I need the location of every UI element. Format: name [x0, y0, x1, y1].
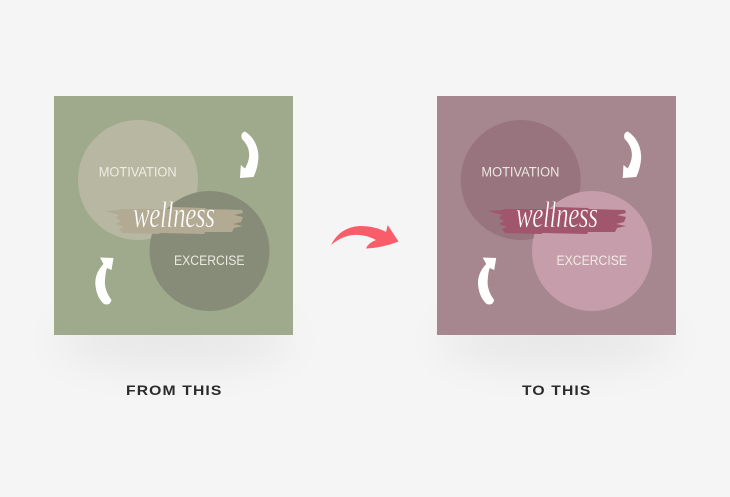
circle: excercise [150, 191, 270, 311]
panel: to this (mauve) [437, 96, 676, 335]
arrow: bottom left, curving up [95, 258, 114, 304]
label: excercise: EXCERCISE [174, 253, 244, 268]
script word: wellness: wellness [516, 194, 598, 235]
brush stroke [105, 207, 243, 234]
label: excercise: EXCERCISE [556, 253, 627, 268]
arrow: red, from left panel to right panel [331, 225, 398, 248]
label: motivation: MOTIVATION [481, 165, 559, 180]
arrow: top right, curving down [623, 132, 641, 178]
script word: wellness: wellness [133, 194, 215, 235]
circle: motivation [461, 120, 581, 240]
circle: motivation [78, 120, 198, 240]
label: motivation: MOTIVATION [99, 165, 177, 180]
caption: to this: TO THIS [522, 382, 592, 398]
circle: excercise [532, 191, 652, 311]
arrow: top right, curving down [240, 132, 258, 178]
panel: from this (green) [54, 96, 293, 335]
caption: from this: FROM THIS [126, 382, 222, 398]
arrow: bottom left, curving up [478, 258, 496, 304]
brush stroke [488, 207, 626, 234]
